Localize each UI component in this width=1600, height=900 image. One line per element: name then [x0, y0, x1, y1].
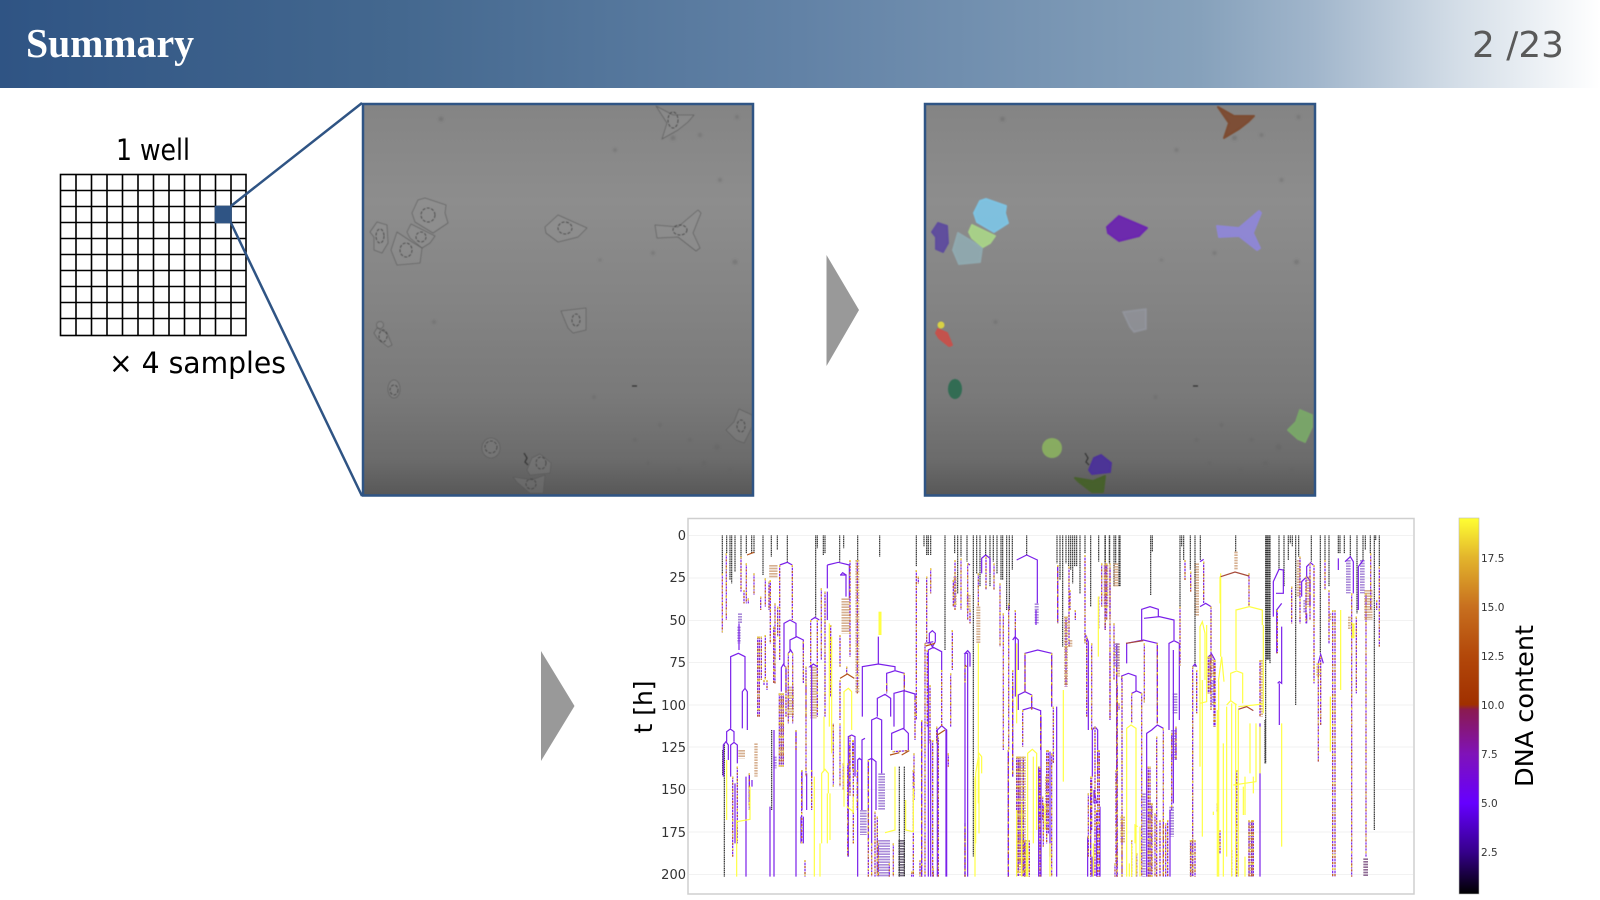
yellow lineages — [727, 597, 1098, 877]
brown forks — [1126, 572, 1253, 711]
y axis ticks: 150 — [661, 783, 686, 798]
purple forks and branches — [1122, 557, 1363, 877]
purple and orange mixed lines — [1102, 553, 1379, 877]
debris — [524, 386, 637, 465]
colorbar tick labels: 17.5 — [1481, 553, 1504, 565]
y axis ticks — [661, 529, 686, 883]
colorbar tick labels: 7.5 — [1481, 749, 1498, 761]
label: 1 well: 1 well — [116, 133, 190, 167]
y axis ticks: 125 — [661, 741, 686, 756]
colorbar tick labels: 2.5 — [1481, 847, 1498, 859]
black, undivided stubs — [722, 535, 1119, 877]
panel: segmented microscopy image — [924, 104, 1315, 496]
debris — [1085, 386, 1198, 465]
brown diagonal links — [747, 552, 967, 755]
y axis ticks: 50 — [669, 614, 686, 629]
black, undivided stubs — [1105, 535, 1379, 830]
y axis ticks: 175 — [661, 826, 686, 841]
plot frame — [688, 518, 1414, 894]
colorbar — [1459, 518, 1539, 894]
colorbar tick labels — [1481, 553, 1504, 859]
colorbar tick labels: 10.0 — [1481, 700, 1504, 712]
colorbar tick labels: 12.5 — [1481, 651, 1504, 663]
zoom connector lines — [231, 103, 362, 496]
arrow: segmented to lineage — [541, 651, 574, 761]
y axis ticks: 75 — [669, 656, 686, 671]
dense blocks — [739, 560, 1118, 877]
lineage, right part — [1102, 535, 1379, 877]
panel: raw microscopy image — [363, 104, 753, 496]
arrow: raw to segmented — [826, 255, 859, 366]
purple forks and branches — [723, 555, 1117, 877]
y axis title: t [h] — [629, 680, 658, 734]
colorbar tick labels: 15.0 — [1481, 602, 1504, 614]
y axis ticks: 100 — [661, 699, 686, 714]
cell nuclei — [376, 112, 745, 489]
lineage, left part — [722, 535, 1119, 877]
purple and orange mixed lines — [722, 553, 1119, 877]
y axis ticks: 200 — [661, 868, 686, 883]
y axis ticks: 0 — [678, 529, 686, 544]
cell outlines — [370, 106, 752, 493]
highlighted grid cell — [216, 206, 231, 222]
well grid — [60, 174, 246, 336]
title: Summary — [26, 20, 194, 66]
segmented cell masks — [932, 107, 1312, 492]
panel border — [363, 104, 753, 496]
label: times 4 samples: × 4 samples — [109, 346, 286, 380]
yellow lineages — [1127, 573, 1341, 877]
page number: 2 /23 — [1472, 25, 1564, 66]
header bar — [0, 0, 1600, 88]
colorbar title: DNA content — [1510, 625, 1539, 787]
colorbar tick labels: 5.0 — [1481, 798, 1498, 810]
chart: lineage tree — [629, 518, 1414, 894]
dense blocks — [1106, 552, 1368, 877]
gradient bar — [1459, 518, 1479, 894]
panel border — [925, 104, 1315, 496]
y axis ticks: 25 — [669, 571, 686, 586]
